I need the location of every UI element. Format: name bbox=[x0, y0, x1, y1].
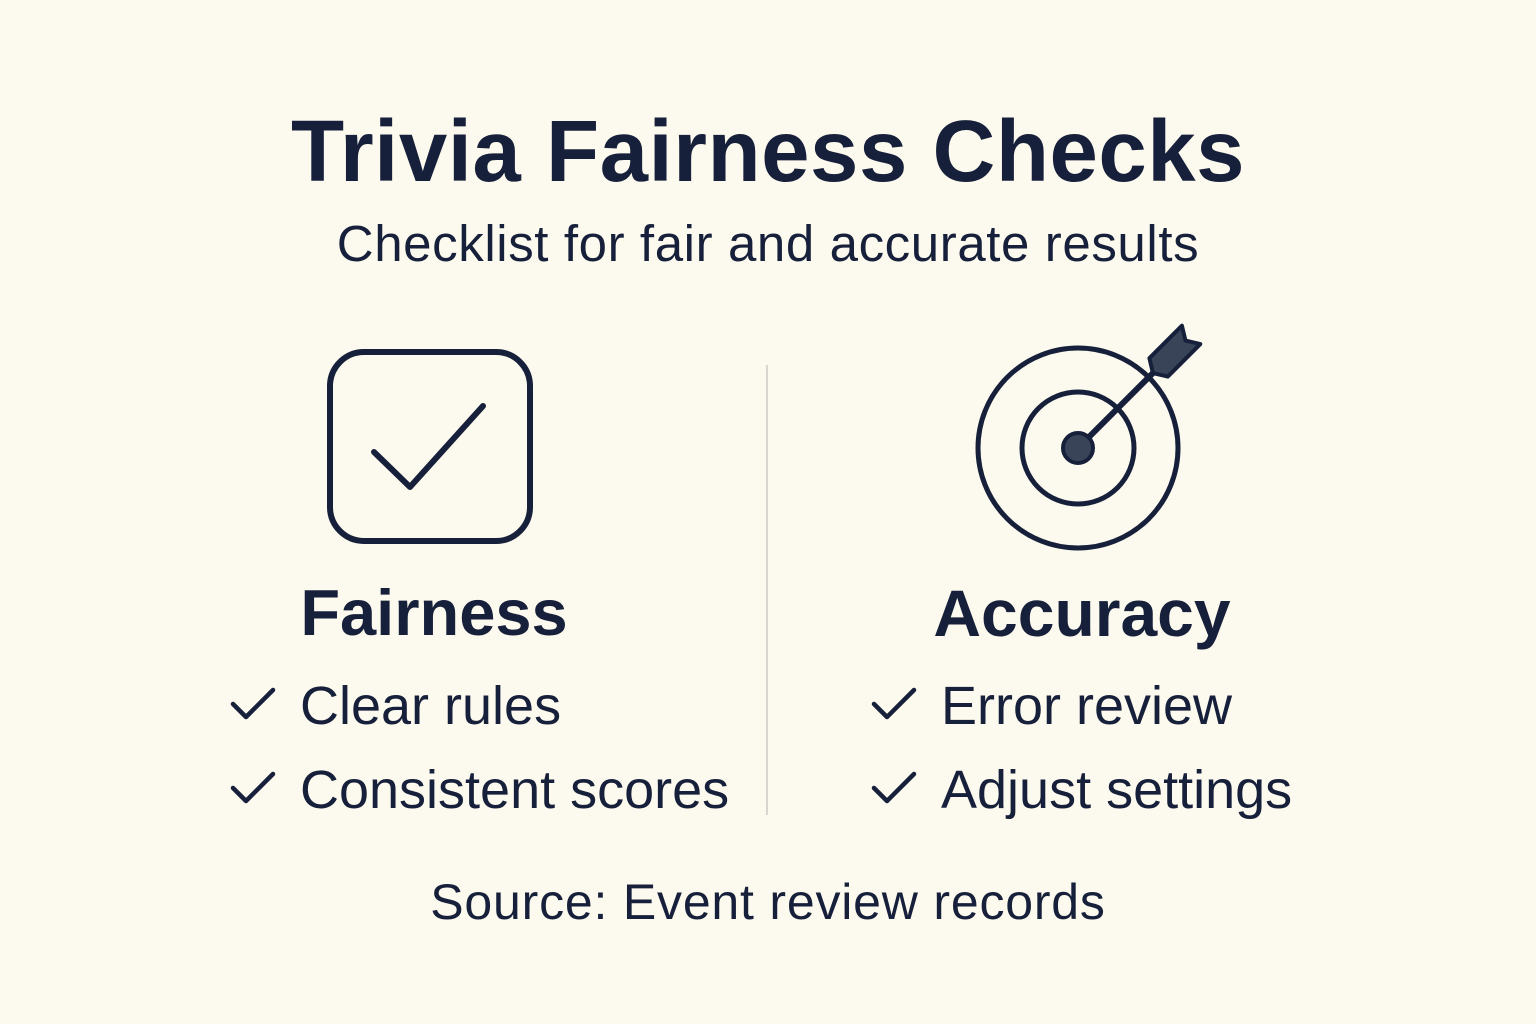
icon: checkbox bbox=[327, 349, 533, 544]
item: clear rules: Clear rules bbox=[300, 676, 561, 736]
heading: Fairness: Fairness bbox=[300, 576, 568, 649]
list: fairness bbox=[230, 676, 729, 820]
title: Trivia Fairness Checks bbox=[291, 103, 1245, 200]
subtitle: Checklist for fair and accurate results bbox=[337, 215, 1199, 272]
item: adjust settings: Adjust settings bbox=[941, 760, 1292, 820]
item: consistent scores: Consistent scores bbox=[300, 760, 729, 820]
source: Source: Event review records bbox=[430, 874, 1106, 930]
list: accuracy bbox=[872, 676, 1292, 820]
heading: Accuracy: Accuracy bbox=[933, 576, 1231, 650]
divider bbox=[766, 365, 768, 815]
item: error review: Error review bbox=[941, 676, 1232, 736]
icon: target with arrow bbox=[976, 324, 1202, 550]
